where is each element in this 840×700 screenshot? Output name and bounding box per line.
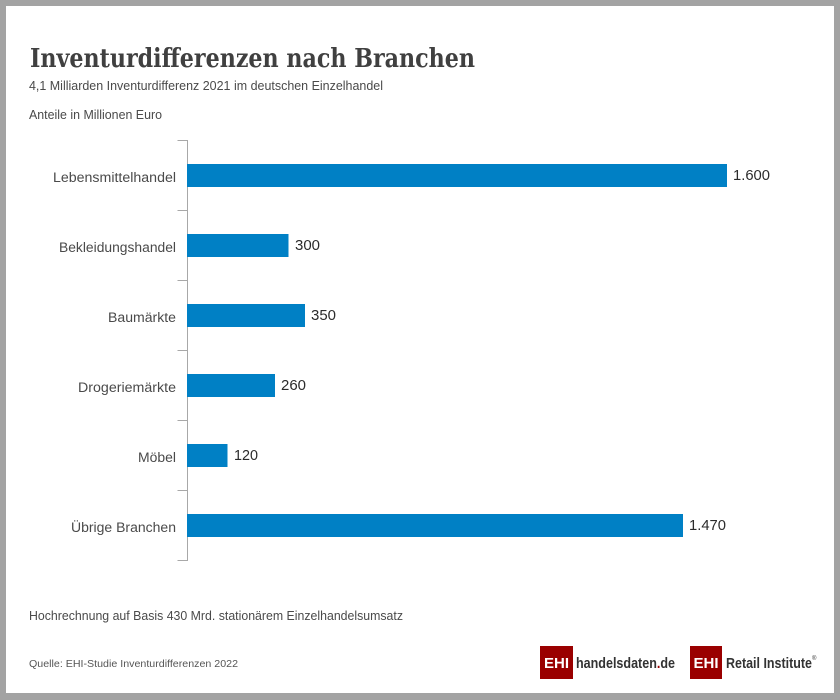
row: Lebensmittelhandel — [53, 164, 770, 187]
row: Übrige Branchen: Übrige Branchen — [71, 520, 176, 535]
logo: EHI Retail Institute: Retail Institute — [726, 655, 812, 672]
logo: EHI handelsdaten.de: handelsdaten.de — [576, 655, 675, 672]
footnote: Hochrechnung auf Basis 430 Mrd. stationärem Einzelhandelsumsatz — [29, 609, 403, 623]
logo: EHI handelsdaten.de — [540, 646, 675, 679]
logo: EHI Retail Institute — [690, 646, 817, 679]
row: Möbel — [138, 444, 258, 467]
row: Baumärkte: 350 — [311, 308, 336, 324]
row: Bekleidungshandel: Bekleidungshandel — [59, 240, 176, 255]
subtitle: 4,1 Milliarden Inventurdifferenz 2021 im deutschen Einzelhandel — [29, 79, 383, 93]
row: Möbel: Möbel — [138, 450, 176, 465]
row: Lebensmittelhandel: Lebensmittelhandel — [53, 170, 176, 185]
source: Quelle: EHI-Studie Inventurdifferenzen 2022 — [29, 658, 238, 670]
row: Übrige Branchen: 1.470 — [689, 518, 726, 534]
row: Bekleidungshandel: 300 — [295, 238, 320, 254]
row: Drogeriemärkte: Drogeriemärkte — [78, 380, 176, 395]
row: Baumärkte: Baumärkte — [108, 310, 176, 325]
logo: EHI Retail Institute: ® — [812, 655, 817, 662]
row: Lebensmittelhandel: 1.600 — [733, 168, 770, 184]
row: Möbel: 120 — [234, 448, 258, 464]
row: Baumärkte — [108, 304, 336, 327]
axis — [178, 140, 188, 560]
row: Drogeriemärkte: 260 — [281, 378, 306, 394]
title: Inventurdifferenzen nach Branchen — [30, 44, 475, 74]
unit note: Anteile in Millionen Euro — [29, 108, 162, 122]
row: Übrige Branchen — [71, 514, 726, 537]
logo: EHI handelsdaten.de: EHI — [544, 655, 569, 672]
row: Drogeriemärkte — [78, 374, 306, 397]
row: Bekleidungshandel — [59, 234, 320, 257]
logo: EHI Retail Institute: EHI — [694, 655, 718, 672]
bar chart — [53, 140, 770, 560]
